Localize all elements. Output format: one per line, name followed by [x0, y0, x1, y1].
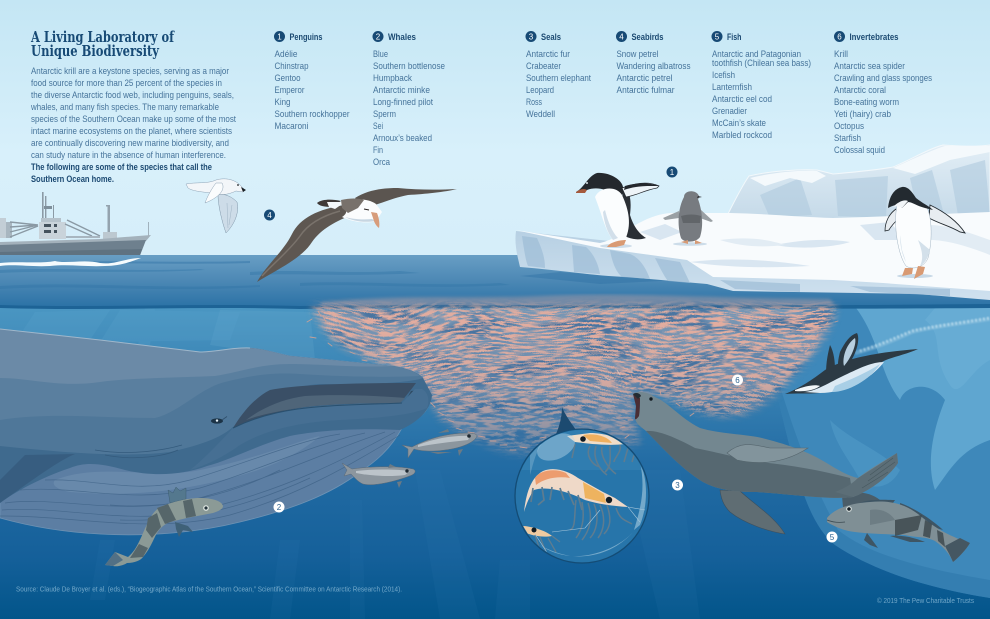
intro text block: species of the Southern Ocean make up some of the most [31, 114, 236, 124]
intro text block: the diverse Antarctic food web, including penguins, seals, [31, 90, 234, 100]
list: whales: Whales [388, 31, 416, 42]
list: seals: Antarctic fur [526, 49, 570, 59]
list: fish: toothfish (Chilean sea bass) [712, 58, 811, 68]
ship foam [0, 258, 141, 266]
list: penguins [274, 31, 350, 131]
list: fish [712, 31, 811, 140]
list: fish: Antarctic eel cod [712, 94, 772, 104]
list: seabirds: Antarctic petrel [616, 73, 672, 83]
whale upper body [0, 329, 432, 503]
marker 6: 6 [735, 376, 740, 385]
list: seals: Crabeater [526, 61, 561, 71]
list: seabirds: Snow petrel [616, 49, 658, 59]
intro text block: can study nature in the absence of human interference. [31, 150, 226, 160]
whale lower jaw lip [190, 389, 428, 470]
list: whales [372, 31, 445, 167]
intro text block: are continually discovering new marine biodiversity, and [31, 138, 229, 148]
list: invertebrates [834, 31, 932, 155]
marker 5: 5 [830, 533, 835, 542]
list: fish: Marbled rockcod [712, 130, 772, 140]
list: fish: Antarctic and Patagonian [712, 49, 801, 59]
list: seals: Southern elephant [526, 73, 591, 83]
light rays [20, 308, 700, 619]
Adelie penguin [576, 173, 659, 248]
scattered krill [307, 308, 838, 450]
underwater background [0, 307, 990, 619]
title [30, 29, 175, 60]
penguin chick [663, 191, 713, 246]
list: invertebrates: Yeti (hairy) crab [834, 109, 891, 119]
marker 1 [666, 166, 678, 178]
icefish [105, 487, 223, 566]
list: seabirds [616, 31, 691, 95]
marker 1: 1 [670, 168, 675, 177]
marker 5 [826, 532, 838, 542]
marker 4 [264, 210, 275, 220]
list: whales: Southern bottlenose [373, 61, 445, 71]
list: whales: Humpback [373, 73, 412, 83]
list: seals: 3 [529, 32, 534, 42]
list: fish: McCain’s skate [712, 118, 766, 128]
seal rear lower flipper [842, 493, 880, 507]
background: sky [0, 0, 990, 256]
seal lower flipper [720, 490, 785, 534]
list: seals: Ross [526, 97, 542, 107]
list: penguins: Adélie [274, 49, 298, 59]
list: penguins: 1 [277, 32, 282, 42]
intro text block: food source for more than 25 percent of the species in [31, 78, 222, 88]
list: invertebrates: Antarctic sea spider [834, 61, 905, 71]
list: invertebrates: Krill [834, 49, 848, 59]
bubble gloss [537, 433, 575, 461]
marker 2: 2 [277, 503, 282, 512]
shark fin [556, 407, 576, 434]
lower krill [523, 510, 600, 552]
large krill [524, 469, 645, 540]
list: penguins: King [274, 97, 290, 107]
list: penguins: Macaroni [274, 121, 308, 131]
wandering albatross [257, 188, 457, 282]
list: whales: Sperm [373, 109, 396, 119]
blue whale [0, 329, 432, 535]
list: fish: Grenadier [712, 106, 747, 116]
marker 3 [672, 480, 683, 490]
list: fish: Fish [727, 31, 742, 42]
list: invertebrates: Invertebrates [850, 31, 898, 42]
list: invertebrates: Starfish [834, 133, 861, 143]
copyright: © 2019 The Pew Charitable Trusts [877, 596, 974, 605]
intro text block: The following are some of the species that call the [31, 162, 212, 172]
waterline [0, 304, 990, 309]
list: seals: Seals [541, 31, 561, 42]
reflection of krill on surface [320, 295, 835, 306]
list: invertebrates: Crawling and glass sponges [834, 73, 932, 83]
bubble trail [855, 318, 990, 353]
list: penguins: Penguins [290, 31, 322, 42]
intro text block: Southern Ocean home. [31, 174, 114, 184]
marker 3: 3 [675, 481, 680, 490]
whale throat highlight [54, 436, 320, 494]
near wing [257, 205, 354, 282]
underwater iceberg [770, 308, 990, 598]
list: invertebrates: Colossal squid [834, 145, 885, 155]
Antarctic fur seal [633, 392, 898, 534]
intro text block: Antarctic krill are a keystone species, serving as a major [31, 66, 229, 76]
chinstrap penguin swimming [785, 318, 990, 394]
list: seals: Weddell [526, 109, 555, 119]
list: whales: Sei [373, 121, 383, 131]
list: invertebrates: 6 [837, 32, 842, 42]
silver fish upper [402, 429, 477, 458]
list: whales: Fin [373, 145, 383, 155]
title: Unique Biodiversity [31, 43, 159, 60]
list: fish: 5 [715, 32, 720, 42]
list: seabirds: 4 [619, 32, 624, 42]
pectoral shoulder shading [0, 454, 75, 503]
list: seabirds: Wandering albatross [616, 61, 691, 71]
list: seals: Leopard [526, 85, 554, 95]
sea surface [0, 255, 990, 307]
list: seabirds: Antarctic fulmar [616, 85, 674, 95]
whale throat grooves [0, 432, 400, 524]
intro text block: intact marine ecosystems on the planet, where scientists [31, 126, 232, 136]
list: penguins: Chinstrap [274, 61, 308, 71]
background iceberg [728, 145, 990, 222]
marbled rockcod [827, 500, 970, 562]
list: penguins: Gentoo [274, 73, 300, 83]
chinstrap penguin standing [885, 187, 965, 279]
silver fish lower [342, 463, 415, 488]
research ship [0, 192, 151, 264]
list: fish: Lanternfish [712, 82, 752, 92]
intro text block [30, 66, 236, 184]
list: fish: Icefish [712, 70, 735, 80]
list: seals [526, 31, 591, 119]
marker 2 [274, 502, 284, 512]
list: invertebrates: Antarctic coral [834, 85, 886, 95]
marker 6 [732, 374, 743, 386]
marker 4: 4 [267, 211, 272, 220]
title: A Living Laboratory of [30, 29, 175, 46]
ice floe with shelf front [515, 212, 990, 300]
list: whales: Blue [373, 49, 388, 59]
krill swarm [306, 300, 841, 459]
list: invertebrates: Octopus [834, 121, 864, 131]
list: whales: Orca [373, 157, 391, 167]
list: whales: Long-finned pilot [373, 97, 433, 107]
intro text block: whales, and many fish species. The many remarkable [30, 102, 219, 112]
snow petrel [186, 179, 246, 233]
source note: Source: Claude De Broyer et al. (eds.), “Biogeographic Atlas of the Southern Ocean,” Scientific Committee on Antarctic Research (2014). [16, 584, 402, 594]
far wing [355, 188, 457, 208]
krill close-up bubble [515, 407, 649, 563]
list: seabirds: Seabirds [632, 31, 664, 42]
list: penguins: Southern rockhopper [274, 109, 350, 119]
whale mouth baleen [233, 383, 416, 428]
whale eye [211, 416, 227, 424]
list: whales: Arnoux’s beaked [373, 133, 432, 143]
list: invertebrates: Bone-eating worm [834, 97, 899, 107]
top krill [567, 433, 635, 475]
list: whales: Antarctic minke [373, 85, 430, 95]
list: whales: 2 [376, 32, 381, 42]
list: penguins: Emperor [274, 85, 304, 95]
